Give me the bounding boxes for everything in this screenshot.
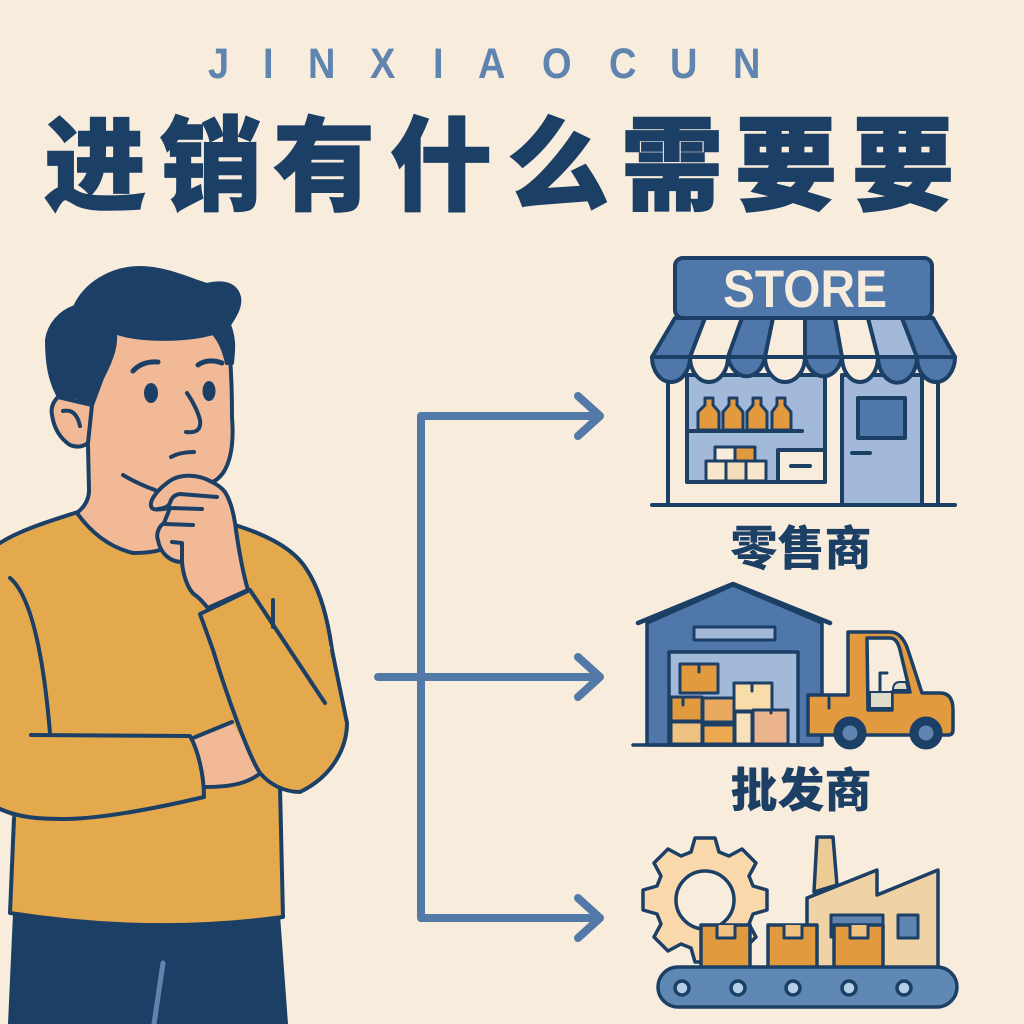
- jaw line: [123, 475, 155, 490]
- sweater outline: [0, 512, 332, 925]
- hair: [47, 268, 239, 405]
- ear inner: [63, 411, 80, 426]
- shelf: [688, 429, 802, 433]
- awning scallops: [652, 357, 955, 383]
- ground: [652, 503, 955, 507]
- gear hole: [676, 871, 734, 929]
- icon: warehouse: [633, 584, 953, 745]
- face outline: [77, 335, 233, 553]
- sweater body: [0, 512, 332, 925]
- ground: [633, 743, 822, 747]
- folded hand: [190, 722, 262, 787]
- roof: [638, 584, 830, 623]
- small boxes: [706, 447, 766, 481]
- boxes: [671, 664, 788, 744]
- mouth: [171, 452, 194, 457]
- nose: [186, 393, 200, 432]
- subtitle: JINXIAOCUN: [208, 39, 760, 87]
- crossed arm outline: [0, 735, 204, 819]
- left eye: [144, 383, 158, 403]
- label: retailer: 零售商: [730, 522, 872, 575]
- forklift seat: [870, 682, 908, 708]
- door opening: [669, 652, 798, 745]
- title: 进销有什么需要要: [44, 110, 954, 224]
- forklift body: [808, 632, 953, 735]
- forklift cab window: [867, 638, 910, 710]
- box tape: [828, 698, 830, 708]
- conveyor belt: [658, 967, 957, 1007]
- front wheel: [838, 721, 862, 745]
- label: wholesaler: 批发商: [730, 764, 872, 817]
- hand on chin: [151, 476, 248, 608]
- gear: [643, 838, 767, 962]
- right brow: [198, 361, 222, 365]
- raised arm outline: [200, 590, 347, 792]
- door handle: [852, 451, 870, 455]
- building: [647, 585, 822, 745]
- right eye: [202, 381, 216, 401]
- door pane: [858, 398, 905, 438]
- boxes: [701, 925, 883, 968]
- face and neck: [77, 330, 233, 553]
- icon: factory: [643, 837, 957, 1007]
- posts: [668, 375, 938, 505]
- ear: [52, 397, 92, 447]
- counter box slot: [791, 464, 810, 468]
- trouser seam: [154, 963, 163, 1024]
- window: [687, 375, 825, 482]
- rear wheel: [914, 721, 938, 745]
- counter box: [778, 450, 825, 482]
- icon: store: [652, 258, 955, 505]
- door: [842, 375, 922, 505]
- store sign: [675, 258, 932, 318]
- folded hand outline: [193, 722, 262, 787]
- seat back: [880, 673, 887, 690]
- fingers: [158, 494, 217, 562]
- store sign text: STORE: [723, 260, 887, 319]
- vent: [694, 627, 775, 640]
- rollers: [675, 981, 911, 995]
- person thinking: [0, 268, 347, 1024]
- factory building: [807, 870, 938, 968]
- raised arm: [200, 590, 347, 792]
- awning stripes: [652, 318, 955, 357]
- crossed arm: [0, 735, 204, 819]
- trousers: [10, 913, 286, 1024]
- left brow: [133, 362, 158, 371]
- chimney: [814, 837, 837, 892]
- branching arrows: [378, 396, 600, 938]
- bottles: [698, 398, 791, 430]
- factory windows: [831, 915, 918, 938]
